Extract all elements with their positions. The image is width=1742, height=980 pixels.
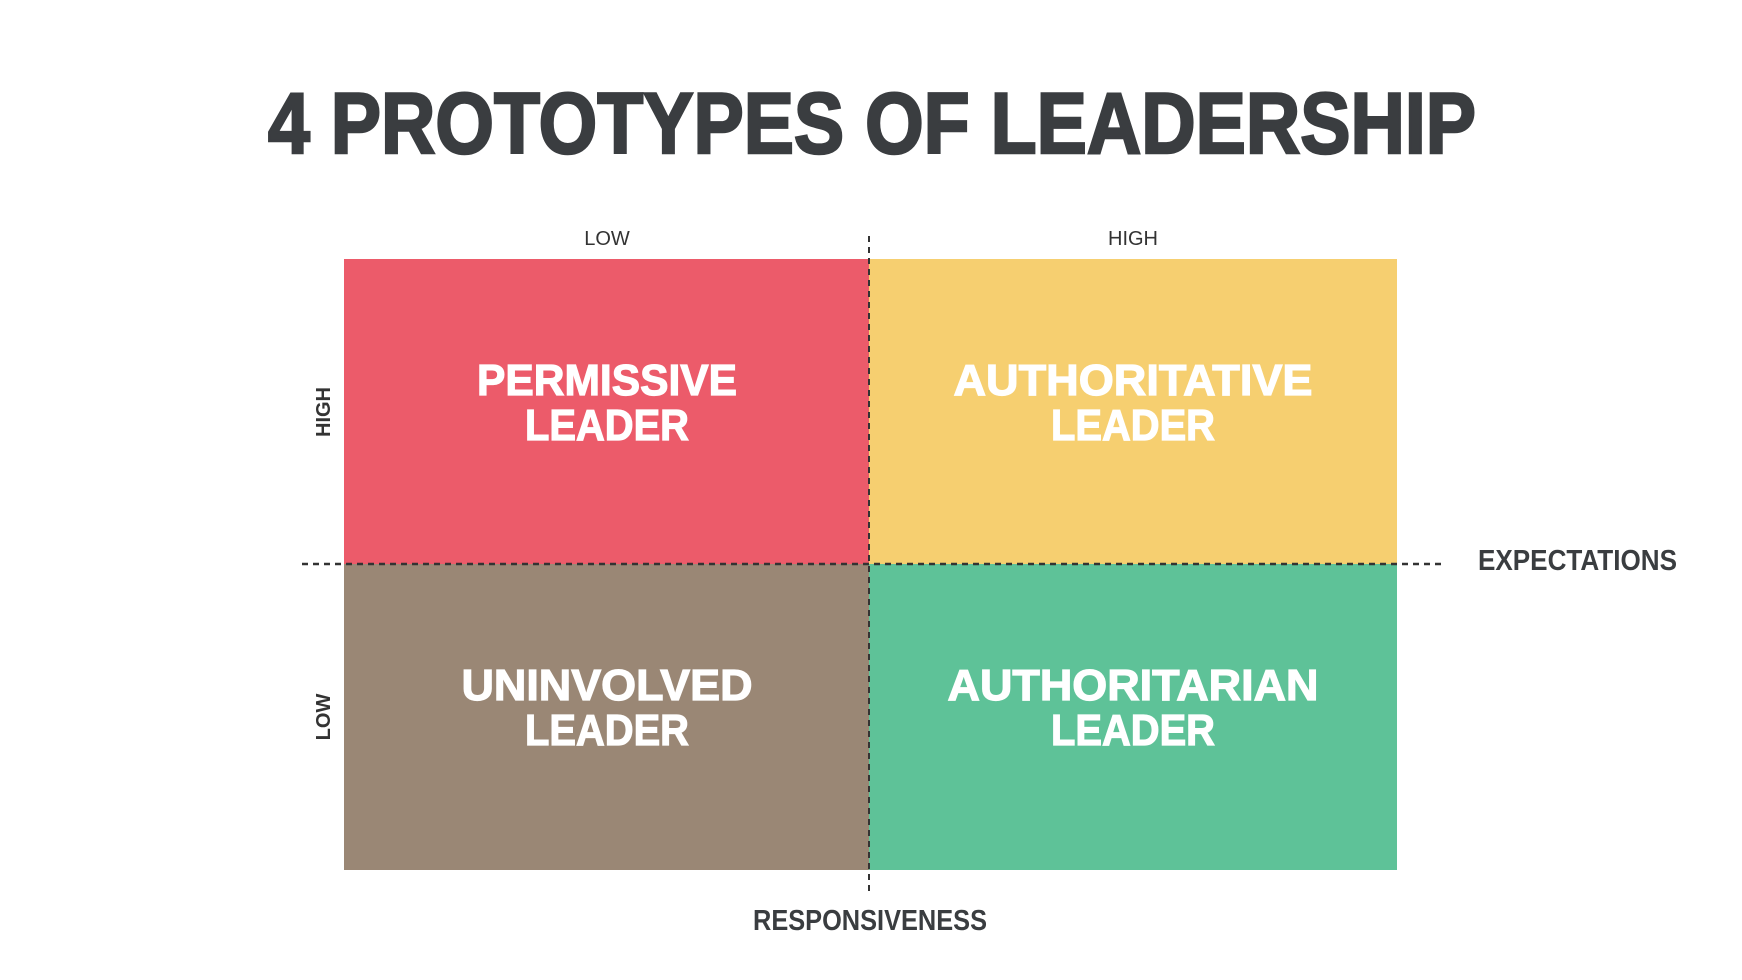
quadrant: uninvolved leader: UNINVOLVED bbox=[462, 661, 752, 710]
quadrant: permissive leader: PERMISSIVE bbox=[477, 356, 737, 405]
title: 4 PROTOTYPES OF LEADERSHIP bbox=[268, 76, 1476, 172]
quadrant: authoritarian leader: LEADER bbox=[1051, 706, 1215, 755]
axis title responsiveness: RESPONSIVENESS bbox=[753, 905, 987, 937]
quadrant: authoritative leader: AUTHORITATIVE bbox=[954, 356, 1312, 405]
top axis label low: LOW bbox=[584, 228, 630, 250]
side axis label high: HIGH bbox=[313, 387, 335, 437]
quadrant: permissive leader: LEADER bbox=[525, 401, 689, 450]
quadrant: authoritarian leader: AUTHORITARIAN bbox=[948, 661, 1318, 710]
top axis label high: HIGH bbox=[1108, 228, 1158, 250]
side axis label low: LOW bbox=[313, 694, 335, 740]
quadrant: authoritarian leader bbox=[869, 564, 1397, 870]
quadrant: uninvolved leader: LEADER bbox=[525, 706, 689, 755]
quadrant: permissive leader bbox=[344, 259, 869, 564]
quadrant: authoritative leader bbox=[869, 259, 1397, 564]
axis title expectations: EXPECTATIONS bbox=[1478, 545, 1677, 577]
quadrant: uninvolved leader bbox=[344, 564, 869, 870]
quadrant: authoritative leader: LEADER bbox=[1051, 401, 1215, 450]
